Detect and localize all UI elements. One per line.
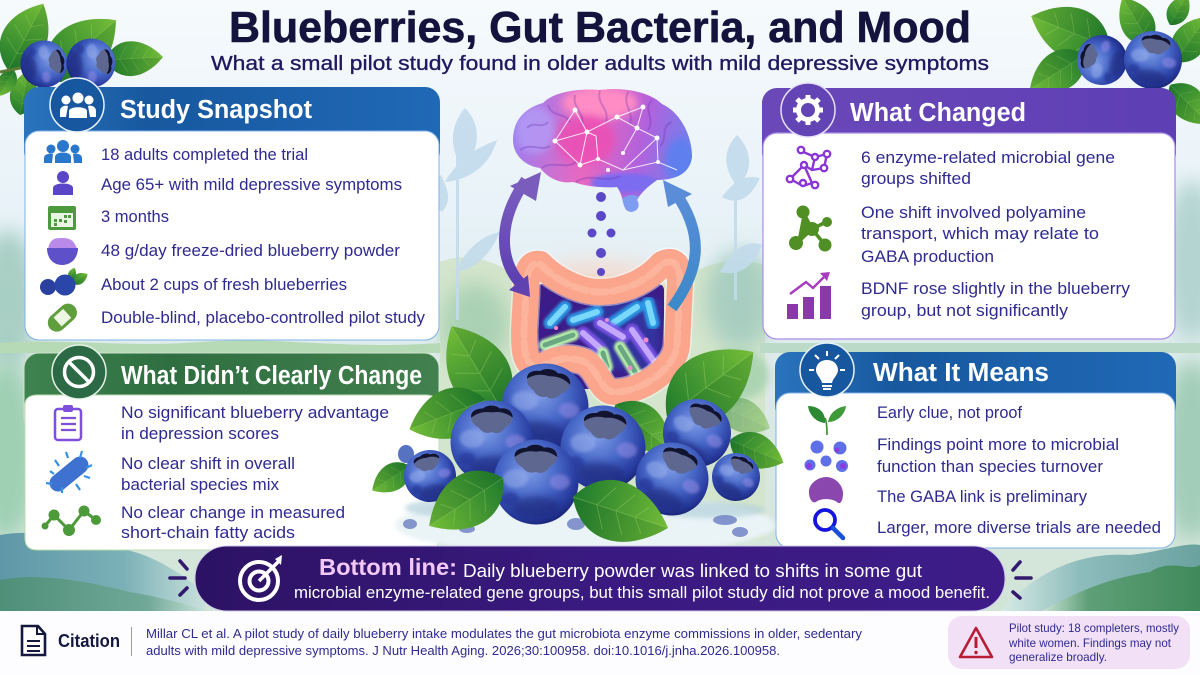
icon: sprout [808, 406, 846, 435]
arrow: brain to gut, right [663, 180, 695, 308]
item text: About 2 cups of fresh blueberries [101, 276, 347, 294]
sparks right [1013, 562, 1031, 598]
icon: group [44, 140, 82, 163]
panel: what it means [775, 343, 1176, 548]
icon: target [240, 555, 282, 600]
icon: pill [44, 300, 81, 335]
icon: blueberries [40, 266, 90, 296]
item text: 6 enzyme-related microbial gene [861, 149, 1115, 167]
panel: study snapshot [24, 78, 440, 340]
item text: Findings point more to microbial [877, 436, 1119, 454]
item text: transport, which may relate to [861, 225, 1099, 243]
item text: 18 adults completed the trial [101, 146, 308, 164]
brain [513, 89, 692, 212]
item text: 48 g/day freeze-dried blueberry powder [101, 242, 401, 260]
blueberries and leaves: top left [0, 0, 164, 117]
warning text [1008, 621, 1179, 664]
heading: What Didn’t Clearly Change [121, 362, 422, 390]
citation label: Citation [58, 631, 120, 651]
icon: warning triangle [960, 628, 992, 657]
warning text: white women. Findings may not [1008, 636, 1172, 650]
citation text [146, 626, 863, 658]
icon: magnifier [815, 510, 843, 538]
subtitle: What a small pilot study found in older adults with mild depressive symptoms [211, 52, 989, 75]
item text: bacterial species mix [121, 476, 280, 494]
icon: enzyme network [787, 147, 830, 188]
panel: what changed [762, 83, 1176, 339]
icon: molecule [789, 206, 832, 252]
item text: Larger, more diverse trials are needed [877, 519, 1161, 537]
item text: Early clue, not proof [877, 404, 1022, 422]
icon: person [53, 171, 73, 195]
panel: what didn't clearly change [24, 345, 439, 550]
icon: gear in circle [781, 83, 835, 137]
bottom line text: Daily blueberry powder was linked to shifts in some gut [463, 561, 922, 581]
blueberry pile [365, 311, 790, 556]
citation [22, 626, 863, 658]
item text [861, 280, 1131, 320]
item text: 3 months [101, 208, 169, 226]
icon: rising chart [787, 272, 831, 319]
heading: Study Snapshot [120, 96, 312, 124]
colon [524, 262, 680, 392]
icon: document [22, 626, 45, 655]
item text: GABA production [861, 248, 994, 266]
icon: people in circle [50, 78, 104, 132]
gut with bacteria [524, 262, 680, 392]
icon: lightbulb in circle [800, 343, 854, 397]
icon: microbes [804, 440, 848, 472]
icon: clipboard [55, 405, 81, 440]
item text: The GABA link is preliminary [877, 488, 1088, 506]
item text: group, but not significantly [861, 302, 1069, 320]
bottom line lead: Bottom line: [319, 554, 457, 580]
item text: short-chain fatty acids [121, 524, 295, 542]
bottom line text second row: microbial enzyme-related gene groups, but this small pilot study did not prove a mood benefit. [294, 583, 990, 602]
warning text: Pilot study: 18 completers, mostly [1009, 621, 1179, 635]
bacteria [545, 303, 653, 375]
icon: prohibited in circle [52, 345, 106, 399]
item text: BDNF rose slightly in the blueberry [861, 280, 1131, 298]
item text: groups shifted [861, 170, 971, 188]
item text: Age 65+ with mild depressive symptoms [101, 176, 402, 194]
item text: One shift involved polyamine [861, 204, 1086, 222]
warning text: generalize broadly. [1009, 650, 1107, 664]
citation text: adults with mild depressive symptoms. J Nutr Health Aging. 2026;30:100958. doi:10.1016/j.jnha.2026.100958. [146, 643, 780, 658]
citation text: Millar CL et al. A pilot study of daily blueberry intake modulates the gut microbiota enzyme commissions in older, sedentary [146, 626, 863, 641]
item text: Double-blind, placebo-controlled pilot study [101, 309, 426, 327]
footer band [0, 611, 1200, 675]
icon: calendar [48, 206, 76, 230]
item text [121, 504, 345, 542]
callout: bottom line [195, 546, 1005, 611]
item text [121, 455, 295, 494]
item text: function than species turnover [877, 458, 1104, 476]
callout: pilot study warning [948, 616, 1190, 669]
item text: No significant blueberry advantage [121, 404, 389, 422]
item text [861, 149, 1115, 188]
item text: No clear change in measured [121, 504, 345, 522]
icon: brain [809, 477, 843, 503]
sparks left [170, 561, 187, 595]
item text [877, 436, 1119, 476]
heading: What Changed [850, 99, 1026, 127]
icon: powder bowl [47, 238, 78, 265]
blueberries and leaves: top right [1020, 0, 1200, 136]
item text [861, 204, 1099, 266]
heading: What It Means [873, 359, 1049, 387]
title: Blueberries, Gut Bacteria, and Mood [229, 3, 971, 52]
icon: fatty acid chain [42, 506, 101, 536]
signal dots [588, 192, 616, 276]
item text: No clear shift in overall [121, 455, 295, 473]
arrow: gut to brain, left [504, 172, 541, 297]
item text [121, 404, 389, 443]
icon: bacterium [46, 451, 92, 493]
item text: in depression scores [121, 425, 279, 443]
